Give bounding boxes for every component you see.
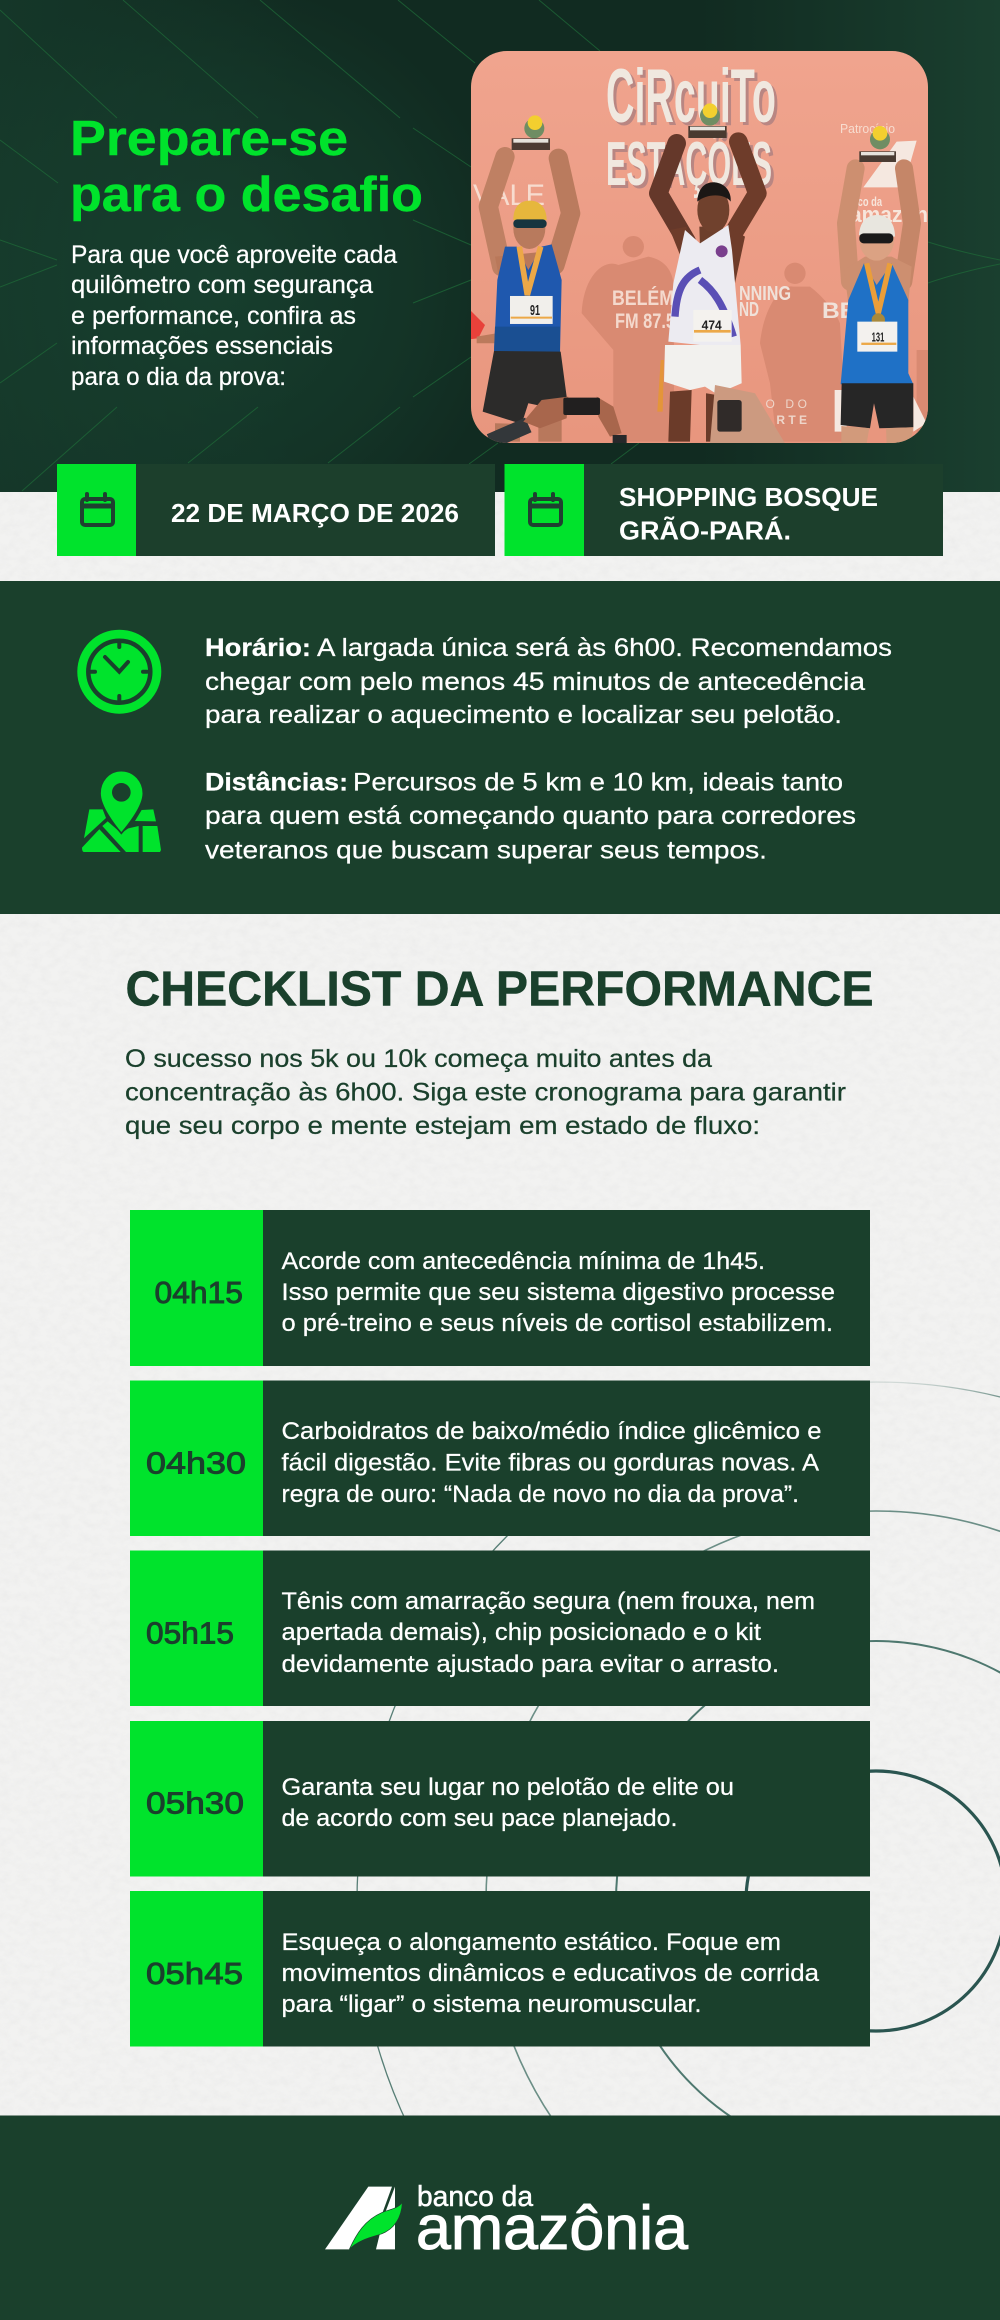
- schedule text: A largada única será às 6h00. Recomendamos: [317, 634, 892, 662]
- runner 2 trophy: [688, 103, 727, 138]
- runner 1: 91: [530, 303, 540, 319]
- wall sign text: [473, 54, 928, 427]
- description: [282, 1248, 835, 1337]
- description: Carboidratos de baixo/médio índice glicêmico e: [282, 1418, 822, 1445]
- wall sign text: NNING: [739, 283, 791, 305]
- icon: map pin: [82, 771, 161, 852]
- wall sign text: VALE: [473, 179, 545, 212]
- location: [619, 482, 878, 546]
- description: Tênis com amarração segura (nem frouxa, nem: [282, 1588, 815, 1615]
- wall sign text: CiRcuiTo: [606, 54, 776, 139]
- footer: [0, 2116, 1000, 2320]
- row: 05h45: [130, 1891, 870, 2046]
- runner 1 trophy: [512, 115, 550, 150]
- date bar: [57, 464, 495, 556]
- description: Esqueça o alongamento estático. Foque em: [282, 1929, 781, 1956]
- intro text: e performance, confira as: [71, 302, 356, 330]
- checklist heading: CHECKLIST DA PERFORMANCE: [126, 962, 874, 1016]
- runner 3: 131: [872, 330, 885, 345]
- panel: race info: [0, 581, 1000, 914]
- time: 04h30: [146, 1446, 246, 1480]
- intro text: informações essenciais: [71, 332, 333, 360]
- runner 2: 474: [702, 317, 722, 332]
- logo: banco da amazônia: [325, 2181, 689, 2263]
- title: para o desafio: [70, 168, 423, 222]
- location: SHOPPING BOSQUE: [619, 482, 878, 512]
- checklist intro: O sucesso nos 5k ou 10k começa muito antes da: [125, 1045, 712, 1073]
- wall sign text: ND: [739, 299, 759, 321]
- description: devidamente ajustado para evitar o arrasto.: [282, 1651, 779, 1678]
- time: 04h15: [154, 1275, 243, 1310]
- checklist intro: concentração às 6h00. Siga este cronograma para garantir: [125, 1078, 846, 1106]
- description: para “ligar” o sistema neuromuscular.: [282, 1991, 702, 2018]
- wall sign text: ES RTE: [747, 413, 807, 427]
- intro text: Para que você aproveite cada: [71, 241, 397, 269]
- runner 1: [470, 115, 627, 443]
- location bar: [504, 464, 943, 556]
- runner 3 trophy: [859, 126, 896, 162]
- row: 05h15: [130, 1550, 870, 1706]
- wall sign text: BE: [822, 298, 856, 323]
- time: 05h30: [146, 1786, 244, 1820]
- checklist intro: [125, 1045, 846, 1140]
- row: 04h30: [130, 1380, 870, 1536]
- wall sign text: amazôn: [850, 202, 928, 227]
- schedule text: [205, 634, 892, 729]
- title: Prepare-se: [70, 112, 348, 166]
- distance text: Distâncias:: [205, 768, 348, 796]
- runner 3: [841, 126, 913, 443]
- intro text: para o dia da prova:: [71, 363, 286, 391]
- schedule text: Horário:: [205, 634, 311, 662]
- logo mark: [325, 2187, 402, 2249]
- description: [282, 1929, 819, 2018]
- distance text: [205, 768, 856, 864]
- schedule text: chegar com pelo menos 45 minutos de antecedência: [205, 668, 865, 696]
- intro text: [71, 241, 397, 391]
- description: regra de ouro: “Nada de novo no dia da prova”.: [282, 1481, 799, 1508]
- description: Isso permite que seu sistema digestivo processe: [282, 1279, 835, 1306]
- wall sign text: ESTAÇÕES: [609, 133, 775, 202]
- description: fácil digestão. Evite fibras ou gorduras novas. A: [282, 1450, 820, 1476]
- logo wordmark: amazônia: [416, 2194, 689, 2263]
- distance text: Percursos de 5 km e 10 km, ideais tanto: [353, 768, 843, 796]
- time: 05h15: [146, 1616, 234, 1650]
- intro text: quilômetro com segurança: [71, 271, 373, 299]
- icon: clock: [77, 630, 161, 714]
- wall sign text: FM 87.5: [615, 310, 675, 333]
- description: Garanta seu lugar no pelotão de elite ou: [282, 1774, 734, 1801]
- checklist intro: que seu corpo e mente estejam em estado de fluxo:: [125, 1112, 760, 1140]
- sponsor logo on wall: [835, 141, 927, 432]
- title: [70, 112, 423, 222]
- paper background: [0, 492, 1000, 2132]
- distance text: para quem está começando quanto para corredores: [205, 802, 856, 830]
- concentric circle decoration: [357, 1382, 1000, 2320]
- row: 04h15: [130, 1210, 870, 1366]
- wall sign text: CiRcuiTo: [609, 57, 779, 142]
- photo wall: [471, 51, 928, 443]
- wall sign text: Patrocínio: [840, 121, 895, 136]
- distance text: veteranos que buscam superar seus tempos.: [205, 836, 767, 864]
- description: [282, 1774, 734, 1832]
- description: [282, 1588, 815, 1678]
- description: o pré-treino e seus níveis de cortisol estabilizem.: [282, 1310, 833, 1337]
- icon: calendar: [82, 494, 113, 525]
- wall shadows: [582, 236, 928, 442]
- wall sign text: ESTAÇÕES: [606, 130, 772, 199]
- description: apertada demais), chip posicionado e o kit: [282, 1619, 761, 1646]
- description: [282, 1418, 822, 1508]
- wall sign text: BELÉM: [612, 287, 674, 310]
- logo wordmark: banco da: [417, 2181, 534, 2213]
- panel: race photo: [470, 51, 928, 443]
- wall sign text: nco da: [852, 194, 883, 209]
- row: 05h30: [130, 1721, 870, 1876]
- time: 05h45: [146, 1956, 243, 1991]
- header background: [0, 0, 1000, 492]
- description: de acordo com seu pace planejado.: [282, 1805, 678, 1832]
- schedule text: para realizar o aquecimento e localizar seu pelotão.: [205, 701, 842, 729]
- runner 2: [657, 103, 785, 443]
- wall sign text: E O DO: [747, 397, 807, 411]
- icon: calendar: [530, 494, 561, 525]
- date: 22 DE MARÇO DE 2026: [171, 498, 459, 528]
- description: Acorde com antecedência mínima de 1h45.: [282, 1248, 765, 1275]
- description: movimentos dinâmicos e educativos de corrida: [282, 1960, 819, 1987]
- location: GRÃO-PARÁ.: [619, 516, 791, 546]
